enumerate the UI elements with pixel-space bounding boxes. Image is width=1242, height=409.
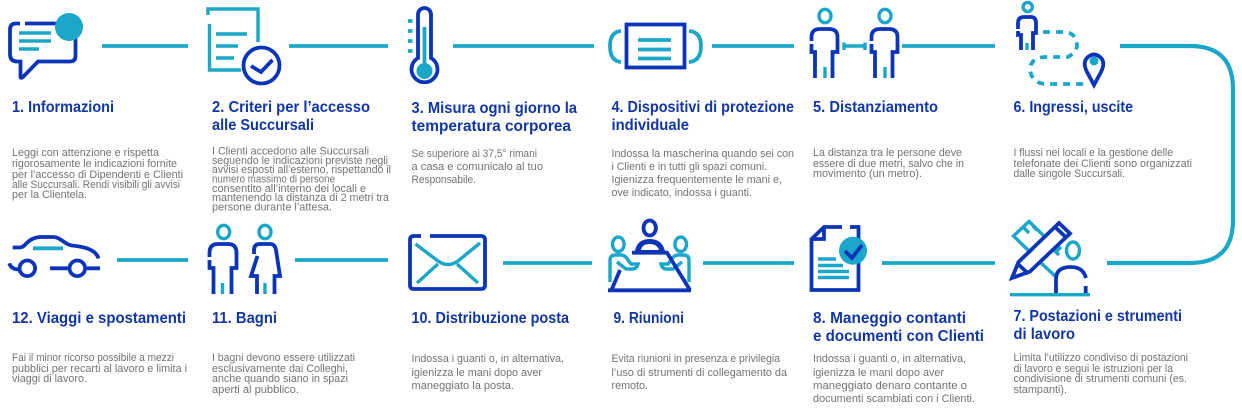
icon: person, dashed route and pin: [1018, 2, 1103, 85]
text block: essere di due metri, salvo che in: [813, 158, 964, 170]
text block: avvisi esposti all’esterno, rispettando il: [212, 164, 391, 176]
text block: remoto.: [612, 380, 648, 392]
text block: Responsabile.: [412, 174, 476, 186]
panel: 1 Informazioni: [10, 13, 183, 201]
heading: di lavoro: [1014, 326, 1075, 343]
panel: 3 Misura temperatura: [408, 8, 577, 186]
text block: ove indicato, indossa i guanti.: [612, 187, 752, 199]
text block: stampanti).: [1014, 384, 1067, 396]
heading: individuale: [612, 117, 689, 134]
icon: thermometer: [408, 8, 438, 82]
text block: per l’accesso di Dipendenti e Clienti: [12, 169, 183, 181]
connectors between steps: [102, 46, 1233, 263]
text block: [1014, 352, 1188, 396]
icon: pencil, ruler and person: [1010, 222, 1090, 295]
heading: 3. Misura ogni giorno la: [412, 100, 577, 117]
text block: rigorosamente le indicazioni fornite: [12, 158, 177, 170]
text block: i Clienti e in tutti gli spazi comuni.: [612, 161, 767, 173]
panel: 6 Ingressi, uscite: [1014, 2, 1192, 180]
text block: [612, 353, 787, 392]
heading: 12. Viaggi e spostamenti: [12, 310, 186, 327]
heading: 11. Bagni: [212, 310, 277, 327]
heading: 4. Dispositivi di protezione: [612, 99, 794, 116]
text block: Indossa la mascherina quando sei con: [612, 148, 794, 160]
panel: 11 Bagni: [210, 225, 355, 396]
heading: 2. Criteri per l’accesso: [212, 99, 370, 116]
text block: persone durante l’attesa.: [212, 202, 332, 214]
icon: meeting table: [608, 220, 691, 290]
icon: document with check: [208, 9, 280, 84]
heading: 7. Postazioni e strumenti: [1014, 308, 1182, 325]
text block: viaggi di lavoro.: [12, 373, 87, 385]
heading: [412, 100, 577, 135]
text block: l’uso di strumenti di collegamento da: [612, 367, 787, 379]
text block: I flussi nei locali e la gestione delle: [1014, 147, 1173, 159]
text block: Leggi con attenzione e rispetta: [12, 147, 159, 159]
icon: document with check badge: [812, 227, 867, 290]
text block: [1014, 147, 1192, 180]
panel: 10 Distribuzione posta: [410, 236, 569, 392]
text block: igienizza le mani dopo aver: [813, 367, 944, 379]
text block: mantenendo la distanza di 2 metri tra: [212, 192, 389, 204]
text block: seguendo le indicazioni previste negli: [212, 155, 388, 167]
heading: [212, 99, 370, 134]
panel: 2 Criteri per l'accesso: [208, 9, 391, 214]
text block: maneggiato denaro contante o: [813, 380, 967, 392]
panel: 4 Dispositivi di protezione: [610, 24, 794, 199]
text block: [612, 148, 794, 199]
text block: [412, 148, 543, 186]
text block: Indossa i guanti o, in alternativa,: [412, 353, 564, 365]
icon: two people at distance: [812, 9, 898, 78]
text block: aperti al pubblico.: [212, 384, 299, 396]
text block: condivisione di strumenti comuni (es.: [1014, 373, 1187, 385]
panel: 5 Distanziamento: [812, 9, 964, 180]
heading: alle Succursali: [212, 117, 314, 134]
text block: Se superiore ai 37,5° rimani: [412, 148, 537, 160]
icon: face mask: [610, 24, 701, 68]
text block: a casa e comunicalo al tuo: [412, 161, 543, 173]
text block: pubblici per recarti al lavoro e limita i: [12, 363, 187, 375]
heading: 6. Ingressi, uscite: [1014, 99, 1133, 116]
heading: 10. Distribuzione posta: [412, 310, 569, 327]
panel: 8 Maneggio contanti: [812, 227, 984, 405]
panel: 12 Viaggi e spostamenti: [9, 237, 187, 385]
text block: I bagni devono essere utilizzati: [212, 352, 355, 364]
text block: [813, 147, 964, 180]
heading: 9. Riunioni: [614, 310, 684, 327]
text block: documenti scambiati con i Clienti.: [813, 393, 975, 405]
text block: I Clienti accedono alle Succursali: [212, 146, 369, 158]
text block: esclusivamente dai Colleghi,: [212, 363, 348, 375]
text block: numero massimo di persone: [212, 174, 335, 186]
text block: [212, 352, 355, 396]
heading: [612, 99, 794, 134]
heading: 8. Maneggio contanti: [813, 310, 966, 327]
heading: temperatura corporea: [412, 118, 571, 135]
text block: Limita l’utilizzo condiviso di postazioni: [1014, 352, 1188, 364]
text block: anche quando siano in spazi: [212, 373, 348, 385]
heading: 1. Informazioni: [12, 99, 114, 116]
icon: car: [9, 237, 100, 276]
panel: 7 Postazioni e strumenti: [1010, 222, 1188, 396]
heading: [813, 310, 984, 345]
text block: dalle singole Succursali.: [1014, 168, 1125, 180]
text block: Fai il minor ricorso possibile a mezzi: [12, 352, 174, 364]
icon: speech bubble: [10, 13, 83, 78]
text block: [412, 353, 564, 392]
icon: man and woman: [210, 225, 280, 294]
text block: per la Clientela.: [12, 189, 87, 201]
text block: maneggiato la posta.: [412, 380, 514, 392]
heading: e documenti con Clienti: [813, 328, 984, 345]
text block: alle Succursali. Rendi visibili gli avvisi: [12, 179, 180, 191]
icon: envelope: [410, 236, 485, 289]
text block: di lavoro e segui le istruzioni per la: [1014, 363, 1173, 375]
text block: telefonate dei Clienti sono organizzati: [1014, 158, 1192, 170]
heading: [1014, 308, 1182, 343]
heading: 5. Distanziamento: [813, 99, 938, 116]
text block: [212, 146, 391, 214]
text block: movimento (un metro).: [813, 168, 922, 180]
panel: 9 Riunioni: [608, 220, 787, 392]
text block: [813, 353, 975, 405]
text block: La distanza tra le persone deve: [813, 147, 962, 159]
text block: [12, 147, 183, 201]
text block: Indossa i guanti o, in alternativa,: [813, 353, 966, 365]
text block: Igienizza frequentemente le mani e,: [612, 174, 782, 186]
text block: [12, 352, 187, 385]
text block: consentito all’interno dei locali e: [212, 183, 366, 195]
text block: Evita riunioni in presenza e privilegia: [612, 353, 780, 365]
text block: igienizza le mani dopo aver: [412, 367, 542, 379]
